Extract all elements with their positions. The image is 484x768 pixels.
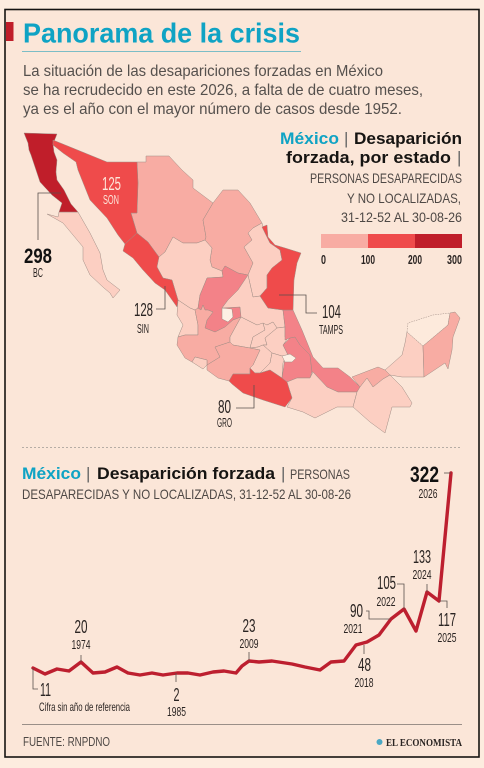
callout: Sinaloa bbox=[134, 286, 165, 336]
chart label: 48: 48 bbox=[358, 655, 371, 675]
chart label: 11 bbox=[33, 668, 51, 700]
chart header: DESAPARECIDAS Y NO LOCALIZADAS, 31-12-52 AL 30-08-26 bbox=[22, 486, 351, 502]
state: Coahuila bbox=[203, 190, 262, 275]
map header: México bbox=[280, 129, 339, 148]
map legend: 300 bbox=[447, 252, 462, 267]
chart label: 90 bbox=[344, 601, 391, 636]
chart label: 322: 2026 bbox=[418, 486, 438, 501]
map header: Desaparición bbox=[354, 129, 462, 148]
callout: Sinaloa: 128 bbox=[134, 300, 153, 320]
icon: red tab bbox=[6, 22, 14, 41]
state: Estado de Mexico bbox=[250, 345, 272, 373]
state: Sinaloa bbox=[123, 233, 178, 307]
callout: Tamaulipas: TAMPS bbox=[319, 322, 343, 337]
chart label: 133: 133 bbox=[413, 547, 431, 567]
callout: Baja California: 298 bbox=[24, 245, 52, 268]
chart header: Desaparición forzada bbox=[97, 464, 276, 483]
title rule bbox=[22, 51, 301, 52]
intro text: La situación de las desapariciones forzadas en México bbox=[23, 63, 383, 80]
state: Jalisco bbox=[177, 305, 241, 365]
chart label: 90: 2021 bbox=[344, 621, 362, 636]
chart label: 133: 2024 bbox=[412, 567, 432, 582]
chart label: 23 bbox=[240, 616, 258, 661]
state: Tlaxcala bbox=[282, 354, 296, 362]
callout: Tamaulipas bbox=[279, 295, 343, 337]
heading block bbox=[6, 18, 301, 52]
state: Morelos bbox=[260, 353, 285, 378]
chart label: 20: 20 bbox=[74, 617, 88, 637]
callout: Sinaloa: SIN bbox=[137, 321, 149, 336]
state: Colima bbox=[192, 357, 207, 369]
state: Chiapas bbox=[353, 375, 412, 433]
chart header: México bbox=[22, 464, 81, 483]
state: Campeche bbox=[385, 332, 424, 377]
state: Queretaro bbox=[250, 322, 277, 348]
chart label: 23: 23 bbox=[242, 616, 256, 636]
state: Nuevo Leon bbox=[244, 223, 282, 297]
callout: Sonora bbox=[102, 174, 121, 207]
state: Veracruz bbox=[283, 310, 360, 392]
chart label: 117 bbox=[438, 601, 456, 645]
state: Durango bbox=[157, 237, 223, 310]
logo: El Economista: EL ECONOMISTA bbox=[386, 738, 462, 749]
chart label: 322 bbox=[410, 462, 451, 501]
map header bbox=[280, 129, 462, 225]
chart header: | bbox=[86, 464, 90, 483]
chart label: 2 bbox=[167, 673, 186, 719]
chart header bbox=[22, 464, 351, 502]
chart label: 105 bbox=[376, 573, 404, 609]
callout: Baja California: BC bbox=[33, 265, 43, 280]
state: Baja California Sur bbox=[47, 212, 120, 298]
chart label: 2: 2 bbox=[174, 685, 180, 705]
state: Michoacan bbox=[207, 342, 260, 381]
chart label: 48 bbox=[354, 645, 374, 690]
state: Yucatan bbox=[407, 313, 450, 346]
map legend: 200 bbox=[408, 252, 422, 267]
map header: | bbox=[457, 148, 461, 167]
intro text: ya es el año con el mayor número de casos desde 1952. bbox=[23, 101, 402, 118]
state: Tabasco bbox=[352, 367, 390, 387]
map header: forzada, por estado bbox=[286, 148, 451, 167]
chart label: 11: 11 bbox=[40, 680, 51, 700]
chart label: 117: 117 bbox=[438, 610, 456, 630]
chart label: 105: 2022 bbox=[376, 594, 396, 609]
chart header: PERSONAS bbox=[290, 466, 350, 482]
chart label: 117: 2025 bbox=[438, 630, 456, 645]
state: Quintana Roo bbox=[423, 312, 460, 377]
chart label: 48: 2018 bbox=[354, 675, 374, 690]
state: Oaxaca bbox=[287, 372, 357, 418]
callout: Tamaulipas: 104 bbox=[322, 302, 341, 322]
state: Guanajuato bbox=[230, 317, 265, 348]
chart label: 2: 1985 bbox=[167, 704, 186, 719]
intro text: se ha recrudecido en este 2026, a falta de de cuatro meses, bbox=[23, 82, 423, 99]
map header: | bbox=[344, 129, 348, 148]
callout: Guerrero: GRO bbox=[217, 415, 232, 430]
line chart bbox=[33, 473, 451, 675]
state: Zacatecas bbox=[198, 266, 248, 332]
map legend bbox=[321, 234, 462, 267]
map header: Y NO LOCALIZADAS, bbox=[347, 190, 461, 206]
source: FUENTE: RNPDNO bbox=[23, 734, 110, 749]
callout: Sonora: SON bbox=[103, 192, 119, 207]
state: Puebla bbox=[282, 337, 312, 382]
state: Guerrero bbox=[229, 368, 292, 407]
callout: Baja California bbox=[24, 193, 61, 280]
state: Hidalgo bbox=[263, 327, 288, 356]
state: Nayarit bbox=[177, 300, 198, 337]
chart label: 20: 1974 bbox=[72, 637, 90, 652]
title: Panorama de la crisis bbox=[23, 18, 300, 48]
chart label: 133 bbox=[412, 547, 432, 592]
callout: Sonora: 125 bbox=[102, 174, 121, 194]
callout: Guerrero: 80 bbox=[218, 397, 231, 417]
state: San Luis Potosi bbox=[222, 275, 285, 328]
state: Aguascalientes bbox=[222, 308, 233, 322]
chart header: | bbox=[281, 464, 285, 483]
state: Tamaulipas bbox=[260, 225, 301, 310]
state: Chihuahua bbox=[131, 156, 213, 257]
state: Sonora bbox=[53, 140, 138, 244]
chart note: Cifra sin año de referencia bbox=[39, 700, 130, 714]
map legend: 0 bbox=[321, 252, 326, 267]
map legend: 100 bbox=[361, 252, 375, 267]
chart label: 90: 90 bbox=[350, 601, 363, 621]
chart label: 322: 322 bbox=[410, 462, 439, 487]
intro text bbox=[23, 63, 423, 118]
map header: 31-12-52 AL 30-08-26 bbox=[341, 209, 462, 225]
callout: Guerrero bbox=[217, 385, 254, 430]
chart label: 23: 2009 bbox=[240, 636, 258, 651]
map of Mexico by state bbox=[24, 133, 460, 433]
chart label: 105: 105 bbox=[377, 573, 396, 593]
chart label: 20 bbox=[72, 617, 90, 662]
state: Baja California bbox=[24, 133, 78, 212]
